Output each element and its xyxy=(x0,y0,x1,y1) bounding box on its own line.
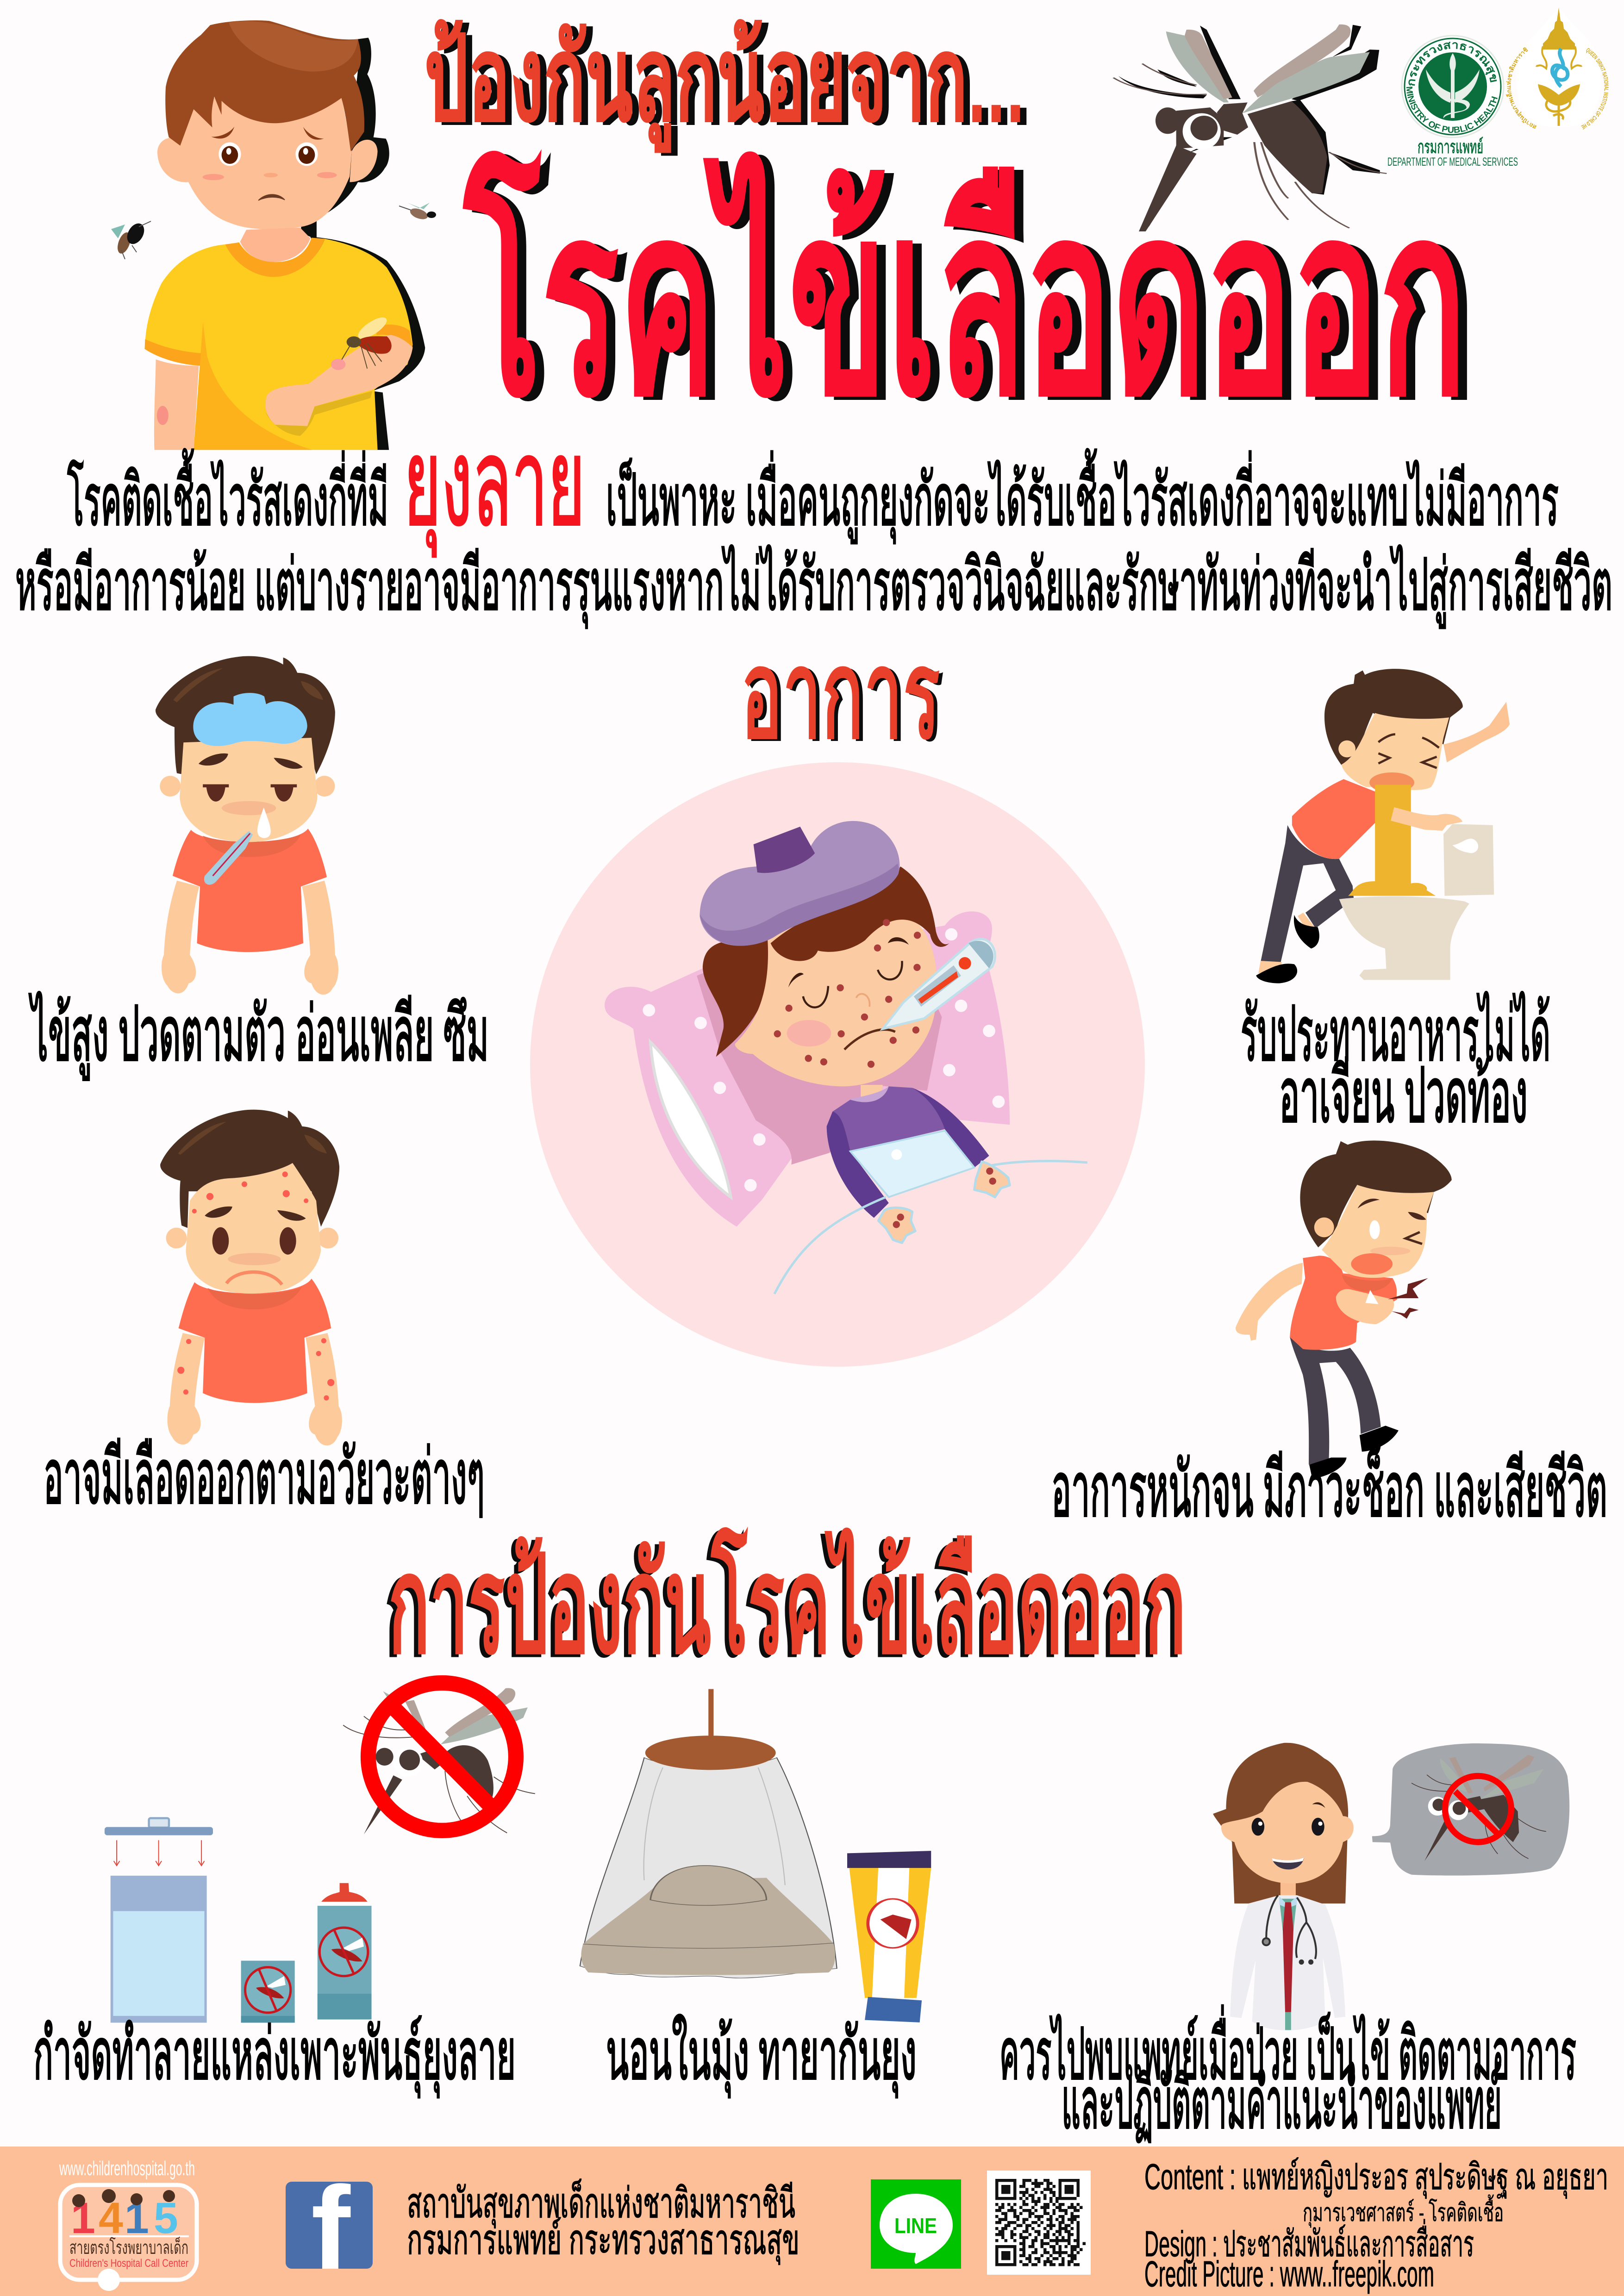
boy face xyxy=(180,95,352,230)
vomit boy facial features xyxy=(1378,734,1439,768)
boy eyes xyxy=(219,143,318,166)
emblem wings xyxy=(1538,84,1580,106)
pain boy shirt xyxy=(1290,1256,1397,1350)
pain zap marks xyxy=(1388,1278,1428,1319)
vomit boy hair xyxy=(1324,669,1463,768)
thermometer xyxy=(883,939,995,1029)
illustration: doctor xyxy=(1213,1743,1354,2030)
logo caduceus xyxy=(1426,53,1480,118)
intro paragraph: โรคติดเชื้อไวรัสเดงกี่ที่มี xyxy=(67,448,388,540)
title line 1 xyxy=(425,13,1031,154)
repellent spray can xyxy=(318,1883,371,2019)
heading: prevention xyxy=(384,1529,1186,1684)
icon: facebook xyxy=(286,2162,373,2294)
logo ring text: MINISTRY OF PUBLIC HEALTH xyxy=(1404,86,1500,135)
child facial features xyxy=(787,937,909,1050)
illustration: rash boy xyxy=(160,1110,342,1445)
vomit boy arm on tank xyxy=(1391,807,1462,831)
mosquito gray wing 2 xyxy=(1243,52,1370,113)
bubble shape xyxy=(1372,1743,1569,1875)
repellent packet xyxy=(241,1961,295,2022)
boy ears xyxy=(157,137,378,182)
text: นอนในมุ้ง ทายากันยุง xyxy=(606,2014,917,2098)
mosquito gray wing 1 xyxy=(1166,31,1229,102)
boy head shadow xyxy=(301,38,389,238)
boy neck xyxy=(240,228,311,262)
pain boy legs xyxy=(1290,1337,1381,1465)
boy hair highlight xyxy=(229,21,358,71)
bubble mosquito brown wings xyxy=(1449,1755,1534,1794)
trash lid xyxy=(105,1818,213,1835)
heading: symptoms: อาการ xyxy=(744,627,944,766)
fever boy ears xyxy=(160,776,335,796)
icon: small mosquito right xyxy=(399,203,436,221)
doctor tie xyxy=(1283,1902,1293,2030)
credit: department: กุมารเวชศาสตร์ - โรคติดเชื้อ xyxy=(1303,2195,1504,2228)
logo frame xyxy=(60,2185,197,2280)
logo numbers: 5 xyxy=(154,2194,178,2243)
stethoscope xyxy=(1263,1895,1316,1964)
logo children heads xyxy=(72,2189,175,2207)
pain boy shoes xyxy=(1309,1426,1399,1479)
rash boy hair highlights xyxy=(178,1122,327,1155)
pillow inner shade xyxy=(697,934,942,1164)
bubble prohibition sign xyxy=(1445,1776,1511,1842)
mosquito brown wing 2 xyxy=(1254,25,1350,98)
boy bite mark xyxy=(157,406,169,425)
emblem crown xyxy=(1543,7,1575,50)
child face xyxy=(735,905,937,1086)
rash boy face xyxy=(186,1163,321,1294)
icon: LINE: LINE xyxy=(894,2214,937,2238)
intro paragraph xyxy=(15,414,1612,628)
vomit boy arm raised xyxy=(1443,702,1510,762)
logo ring text: กระทรวงสาธารณสุข xyxy=(1405,39,1500,87)
pain boy facial features xyxy=(1351,1199,1426,1275)
pillow white opening xyxy=(650,1042,731,1197)
prohibition sign xyxy=(368,1683,516,1830)
icon: facebook: f xyxy=(311,2162,351,2294)
rash boy hair xyxy=(160,1110,339,1228)
ice bag cap xyxy=(754,827,815,873)
logo thai label: สายตรงโรงพยาบาลเด็ก xyxy=(69,2236,188,2258)
speech bubble with banned mosquito xyxy=(1372,1743,1569,1875)
doctor coat xyxy=(1230,1895,1345,2030)
net post xyxy=(708,1689,713,1738)
footer organisation text: กรมการแพทย์ กระทรวงสาธารณสุข xyxy=(407,2217,800,2265)
illustration: eliminate breeding sites xyxy=(105,1683,535,2022)
pillow xyxy=(605,911,1010,1226)
logo caption english: DEPARTMENT OF MEDICAL SERVICES xyxy=(1387,156,1518,168)
rash spots on hands xyxy=(893,1168,996,1228)
fever boy hair highlights xyxy=(173,668,323,703)
pain boy face xyxy=(1322,1185,1434,1278)
logo english label: Children's Hospital Call Center xyxy=(69,2257,188,2270)
rash boy shirt xyxy=(179,1279,331,1403)
bubble mosquito body xyxy=(1412,1775,1546,1861)
vomit stream xyxy=(1348,785,1436,896)
mattress pillow xyxy=(650,1866,767,1905)
bubble mosquito wings xyxy=(1440,1758,1544,1799)
logo caption thai: กรมการแพทย์ xyxy=(1418,137,1483,157)
rash spots on face xyxy=(774,919,921,1068)
rash dots xyxy=(177,1171,334,1400)
title line 1: ป้องกันลูกน้อยจาก... xyxy=(431,16,1031,154)
rash boy collar shade xyxy=(207,1287,302,1309)
doctor hair xyxy=(1213,1743,1348,1904)
arrows pointing down xyxy=(114,1840,204,1866)
footer organisation text xyxy=(407,2178,800,2265)
vomit boy ear xyxy=(1338,740,1355,758)
logo numbers: 4 xyxy=(99,2194,123,2243)
doctor shirt xyxy=(1279,1899,1297,1941)
vomit boy legs xyxy=(1261,825,1354,962)
ice pack on head xyxy=(193,693,307,746)
fever boy shirt xyxy=(173,829,327,952)
boy body shadow xyxy=(311,237,425,450)
caption: vomiting xyxy=(1241,991,1550,1138)
footer website: www.childrenhospital.go.th xyxy=(59,2157,195,2180)
logo: ministry of public health xyxy=(1402,36,1504,137)
mosquito thorax xyxy=(1217,102,1248,135)
child hands xyxy=(878,1162,1010,1243)
mosquito proboscis xyxy=(1139,145,1197,231)
doctor neck xyxy=(1280,1882,1296,1899)
logo numbers: 1 xyxy=(125,2194,149,2243)
toilet xyxy=(1339,824,1494,980)
doctor eyes and smile xyxy=(1252,1802,1325,1869)
pink circle backdrop xyxy=(530,762,1145,1367)
vomit boy shirt xyxy=(1292,779,1394,859)
caption: see a doctor xyxy=(999,2005,1576,2143)
boy brows, nose, cheeks, mouth xyxy=(202,127,337,200)
emblem crown sides xyxy=(1536,46,1582,68)
illustration: vomiting boy xyxy=(1256,669,1510,983)
footer organisation text: สถาบันสุขภาพเด็กแห่งชาติมหาราชินี xyxy=(407,2178,795,2228)
logo ring text xyxy=(1404,39,1500,135)
emblem snakes xyxy=(1546,95,1570,126)
fever boy hair back xyxy=(156,656,335,774)
pain boy hair xyxy=(1300,1140,1452,1247)
pain boy ear xyxy=(1314,1218,1334,1237)
boy hair xyxy=(165,20,364,151)
repellent tube xyxy=(847,1851,931,2022)
boy forearm xyxy=(265,335,412,426)
mosquito abdomen xyxy=(1248,101,1327,193)
mattress front seam xyxy=(583,1943,834,1948)
boy shirt shade xyxy=(194,322,312,450)
banned mosquito xyxy=(343,1688,535,1835)
fever boy arms xyxy=(162,881,338,995)
pain boy hand on chest xyxy=(1336,1289,1394,1324)
text: กำจัดทำลายแหล่งเพาะพันธุ์ยุงลาย xyxy=(33,2014,516,2098)
logo phone button xyxy=(98,2269,120,2291)
icon: small mosquito left xyxy=(111,220,151,259)
highlighted word: ยุงลาย: ยุงลาย xyxy=(404,414,585,557)
net canopy disc xyxy=(645,1736,776,1770)
thermometer in mouth xyxy=(204,831,253,885)
logo numbers: 1 xyxy=(71,2194,95,2243)
boy hand shadow xyxy=(265,391,372,436)
illustration: big mosquito xyxy=(1113,25,1387,231)
vomit boy face xyxy=(1342,713,1449,790)
doctor collar xyxy=(1279,1897,1297,1908)
heading: symptoms xyxy=(741,625,944,766)
mattress xyxy=(581,1878,835,1975)
mosquito net xyxy=(580,1758,837,1978)
illustration: chest pain boy xyxy=(1236,1140,1452,1479)
rash boy arms xyxy=(168,1333,342,1445)
fever boy collar shade xyxy=(203,834,301,857)
child back hair xyxy=(703,940,776,1057)
text: ไข้สูง ปวดตามตัว อ่อนเพลีย ซึม xyxy=(29,991,489,1080)
logo: queen sirikit institute xyxy=(0,0,1610,131)
vomit boy feet and shoes xyxy=(1256,913,1319,983)
blanket outline xyxy=(775,1161,1087,1294)
vomit boy mouth xyxy=(1369,772,1414,793)
child neck xyxy=(861,1085,883,1097)
net seams xyxy=(644,1767,785,1885)
fever boy face xyxy=(180,738,318,842)
mosquito biting arm xyxy=(331,313,392,370)
mosquito legs and antennae xyxy=(1113,63,1387,228)
logo numbers xyxy=(71,2194,178,2243)
illustration: boy bitten by mosquito xyxy=(144,20,425,450)
mosquito eyes xyxy=(1156,107,1224,149)
mosquito black shadow xyxy=(1118,25,1380,226)
rash boy facial features xyxy=(205,1207,306,1285)
icon: LINE xyxy=(871,2179,961,2269)
water container xyxy=(111,1876,207,2022)
illustration: mosquito net and repellent xyxy=(580,1689,931,2022)
child body xyxy=(827,1086,989,1218)
boy left arm xyxy=(154,359,199,450)
emblem blue letter xyxy=(1552,49,1568,87)
QR code xyxy=(987,2171,1091,2275)
boy shirt xyxy=(145,239,412,450)
ice bag xyxy=(700,821,899,946)
fever boy facial features xyxy=(199,753,303,838)
doctor face xyxy=(1221,1782,1354,1884)
text: อาจมีเลือดออกตามอวัยวะต่างๆ xyxy=(44,1434,485,1519)
pain boy arm xyxy=(1236,1263,1303,1341)
footer credits xyxy=(1144,2156,1608,2294)
pain boy white gap xyxy=(1365,1290,1379,1304)
child front hair xyxy=(771,866,949,961)
title line 1: ป้องกันลูกน้อยจาก... xyxy=(425,13,1025,151)
logo: 1415 call center xyxy=(60,2185,197,2291)
heading: symptoms: อาการ xyxy=(741,625,940,765)
boy shirt collar and sleeve bands xyxy=(144,238,412,366)
ice bag shade xyxy=(700,864,899,946)
rash boy ears xyxy=(166,1228,338,1249)
pillow polka dots xyxy=(643,928,1005,1191)
mosquito brown wing 1 xyxy=(1185,30,1232,99)
logo divider xyxy=(69,2235,189,2237)
illustration: sick child in bed xyxy=(605,821,1087,1294)
footer band xyxy=(0,2147,1624,2296)
illustration: fever boy xyxy=(156,656,338,995)
pain boy collar shade xyxy=(1342,1275,1393,1292)
